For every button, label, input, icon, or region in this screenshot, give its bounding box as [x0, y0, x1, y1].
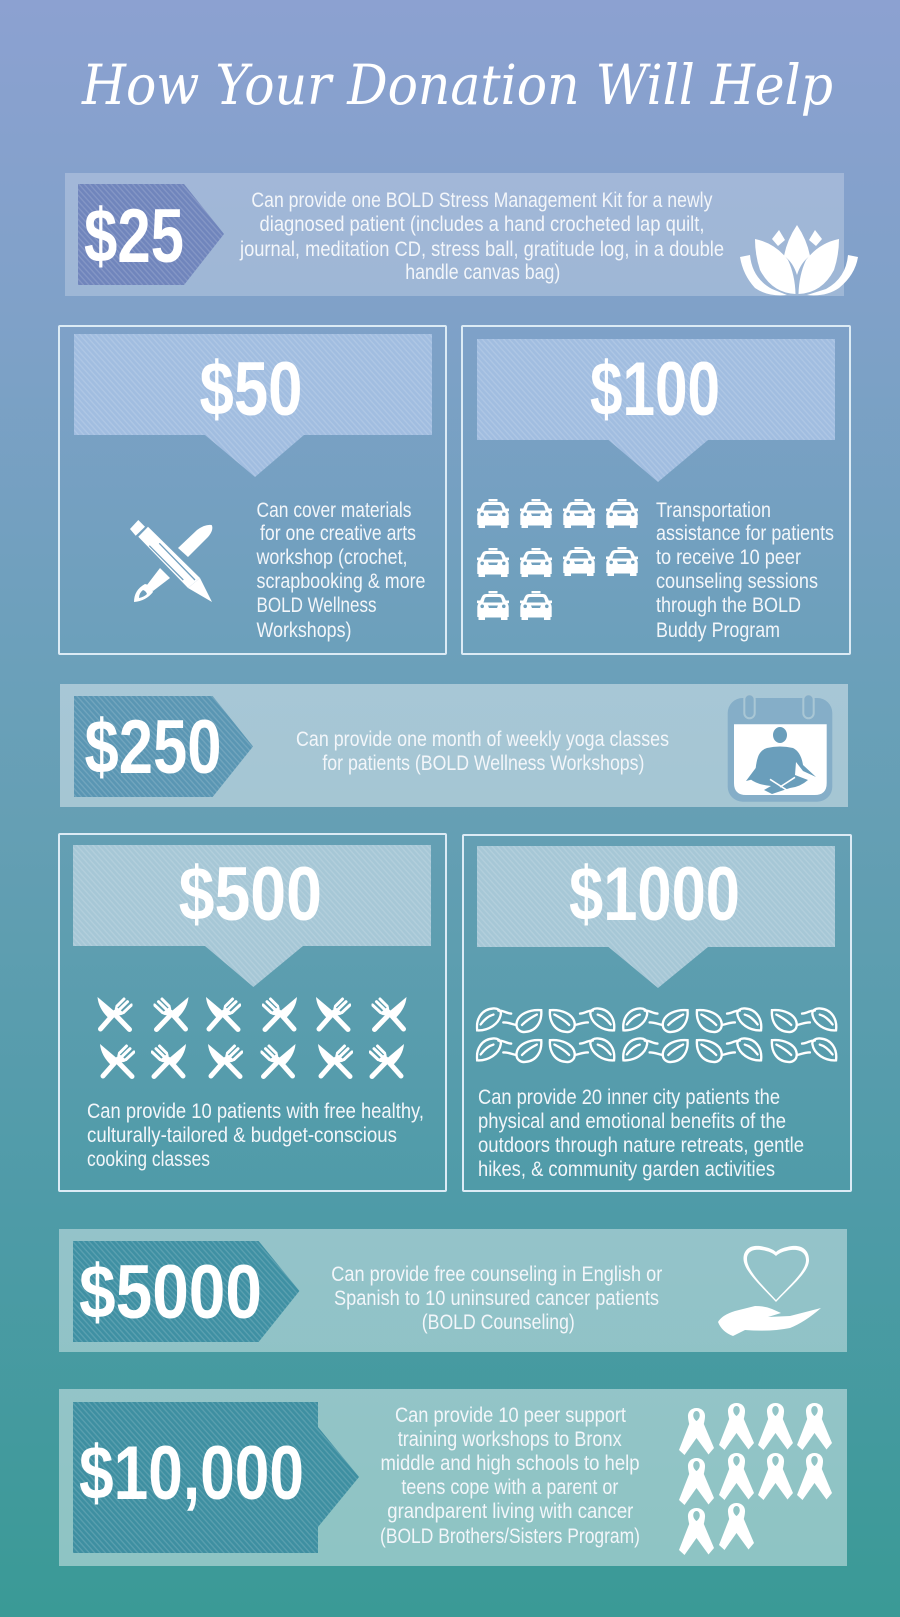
description text: Buddy Program	[656, 619, 780, 642]
description text: Can provide 10 patients with free healthy,	[87, 1100, 424, 1123]
icon: ten taxis	[477, 499, 638, 620]
price banner	[74, 334, 432, 477]
description text: cooking classes	[87, 1148, 210, 1171]
description text	[296, 728, 669, 775]
description text: workshop (crochet,	[256, 546, 408, 569]
description text	[239, 189, 724, 284]
description text: teens cope with a parent or	[401, 1476, 618, 1499]
price arrow: $10,000	[79, 1431, 304, 1516]
price arrow: $25	[84, 194, 184, 279]
price arrow: $250	[84, 705, 222, 790]
description text: Can provide one BOLD Stress Management Kit for a newly	[251, 189, 713, 212]
description text: Spanish to 10 uninsured cancer patients	[334, 1287, 659, 1310]
description text: Can provide one month of weekly yoga classes	[296, 728, 669, 751]
description text	[478, 1086, 804, 1181]
panel: $250 tier	[60, 684, 848, 807]
price arrow	[73, 1402, 359, 1553]
icon: rows of leaves	[477, 1008, 836, 1062]
description text: for patients (BOLD Wellness Workshops)	[322, 752, 644, 775]
description text: for one creative arts	[260, 522, 416, 545]
description text: training workshops to Bronx	[398, 1428, 622, 1451]
panel: $500 tier	[59, 834, 446, 1191]
description text: culturally-tailored & budget-conscious	[87, 1124, 397, 1147]
description text: Can cover materials	[256, 499, 412, 522]
price banner	[477, 339, 835, 482]
panel: $1000 tier	[463, 835, 851, 1191]
description text: journal, meditation CD, stress ball, gratitude log, in a double	[239, 238, 724, 261]
panel: $5000 tier	[59, 1229, 847, 1352]
description text: Can provide 10 peer support	[395, 1404, 626, 1427]
panel border	[59, 834, 446, 1191]
description text: Can provide free counseling in English or	[331, 1263, 662, 1286]
panel border	[463, 835, 851, 1191]
panel background	[59, 1229, 847, 1352]
icon: lotus	[740, 225, 858, 295]
price banner: $100	[590, 347, 720, 432]
description text: hikes, & community garden activities	[478, 1158, 775, 1181]
description text: scrapbooking & more	[256, 570, 426, 593]
description text: counseling sessions	[656, 570, 818, 593]
panel border	[462, 326, 850, 654]
description text	[256, 499, 426, 642]
icon: ten awareness ribbons	[679, 1403, 832, 1555]
panel border	[59, 326, 446, 654]
description text	[656, 499, 834, 642]
panel: $100 tier	[462, 326, 850, 654]
panel background	[65, 173, 844, 296]
icon: yoga calendar	[728, 694, 832, 802]
description text: diagnosed patient (includes a hand crocheted lap quilt,	[260, 213, 704, 236]
description text: Can provide 20 inner city patients the	[478, 1086, 780, 1109]
description text: (BOLD Counseling)	[422, 1311, 575, 1334]
description text: handle canvas bag)	[405, 261, 560, 284]
description text: to receive 10 peer	[656, 546, 801, 569]
description text: outdoors through nature retreats, gentle	[478, 1134, 804, 1157]
description text: physical and emotional benefits of the	[478, 1110, 786, 1133]
description text: BOLD Wellness	[256, 594, 376, 617]
price banner: $1000	[569, 852, 740, 937]
price banner: $500	[179, 852, 322, 937]
icon: twelve crossed knives and forks	[98, 997, 406, 1076]
description text: Workshops)	[256, 619, 352, 642]
panel background	[59, 1389, 847, 1566]
description text	[380, 1404, 640, 1548]
description text	[87, 1100, 424, 1171]
price banner: $50	[200, 347, 302, 432]
icon: heart in hand	[718, 1246, 821, 1336]
panel background	[60, 684, 848, 807]
panel: $50 tier	[59, 326, 446, 654]
price arrow: $5000	[79, 1250, 262, 1335]
title: How Your Donation Will Help	[81, 53, 833, 117]
panel: $25 tier	[65, 173, 858, 296]
description text: middle and high schools to help	[380, 1452, 640, 1475]
description text: (BOLD Brothers/Sisters Program)	[380, 1525, 640, 1548]
icon: pencil and brush	[130, 520, 212, 602]
price banner	[73, 845, 431, 987]
price banner	[477, 846, 835, 988]
description text: Transportation	[656, 499, 771, 522]
description text: assistance for patients	[656, 522, 834, 545]
description text: grandparent living with cancer	[387, 1500, 633, 1523]
description text: through the BOLD	[656, 594, 801, 617]
description text	[331, 1263, 662, 1334]
panel: $10,000 tier	[59, 1389, 847, 1566]
